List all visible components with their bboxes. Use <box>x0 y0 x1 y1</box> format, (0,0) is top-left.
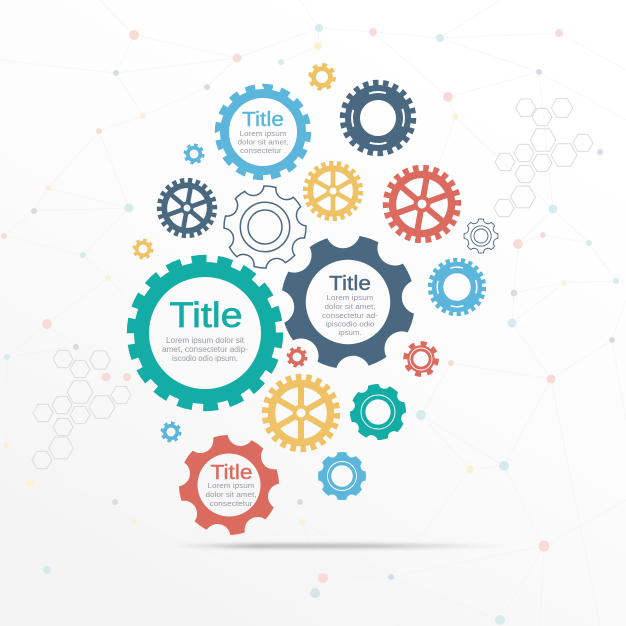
gear: small yellow top <box>310 65 334 89</box>
ground shadow <box>168 543 512 549</box>
gear: small blue left <box>185 145 203 163</box>
text block: dark gear: Lorem ipsum <box>326 293 374 302</box>
gear: red title <box>171 427 287 543</box>
text block: dark gear: ipiscodio odio <box>326 320 374 328</box>
gear: blue title <box>218 86 308 178</box>
gear: small red center <box>288 348 306 366</box>
text block: teal gear: iscodio odio ipsum. <box>172 354 238 363</box>
text block: red gear: Lorem ipsum <box>208 481 254 490</box>
wheel: red spoked <box>380 162 464 246</box>
wheel: yellow spoked bottom <box>265 377 337 449</box>
text block: teal gear <box>162 336 248 363</box>
gear: blue small bottom <box>318 452 366 500</box>
hexagon cluster: left <box>32 350 131 469</box>
text block: blue gear: dolor sit amet, <box>238 138 288 146</box>
title: red gear: Title <box>210 462 252 484</box>
title: teal gear: Title <box>170 296 242 335</box>
text block: blue gear <box>238 129 288 155</box>
text block: blue gear: Lorem ipsum <box>240 129 286 138</box>
gear: small yellow left <box>134 240 152 258</box>
gear: small outline <box>464 219 498 253</box>
gear: outline large <box>219 181 311 273</box>
gear: dark title <box>263 217 433 387</box>
hexagon cluster: right <box>494 99 593 217</box>
gear: small blue bottom left <box>162 423 180 441</box>
text block: teal gear: Lorem ipsum dolor sit <box>166 336 245 345</box>
text block: red gear: dolor sit amet, <box>206 490 256 499</box>
gear: teal title large <box>131 259 279 407</box>
text block: red gear <box>206 481 256 508</box>
wheel: yellow spoked top <box>305 163 361 219</box>
gear: dark sprocket top <box>343 83 413 153</box>
text block: dark gear: consectetur ad- <box>322 311 379 320</box>
text block: blue gear: consectetur . <box>240 146 286 155</box>
title: dark gear: Title <box>329 273 371 295</box>
wheel: dark spoked <box>155 176 219 240</box>
gear: blue sprocket right <box>430 260 484 314</box>
text block: dark gear: dolor sit amet, <box>325 302 375 311</box>
text block: teal gear: amet, consectetur adip- <box>162 345 248 354</box>
text block: dark gear: ipsum. <box>338 328 362 337</box>
title: blue gear: Title <box>242 109 284 131</box>
text block: dark gear <box>322 293 379 337</box>
gear: teal small <box>346 380 410 444</box>
text block: red gear: consectetur <box>210 499 253 508</box>
gear: small red right <box>405 343 437 375</box>
